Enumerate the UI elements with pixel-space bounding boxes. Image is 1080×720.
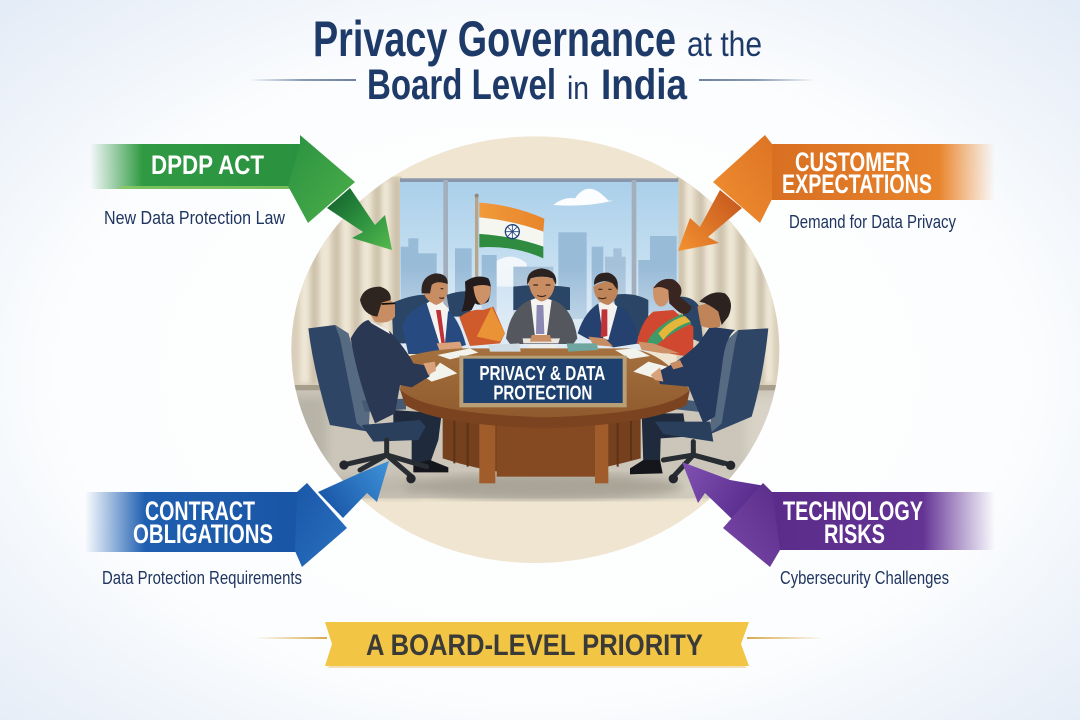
person: man 2 xyxy=(402,273,466,354)
arrow: Technology Risks (purple) xyxy=(682,462,995,588)
person: center man xyxy=(506,268,577,344)
arrow: Customer Expectations (orange) xyxy=(678,135,995,251)
arrow: DPDP Act (green): DPDP ACT xyxy=(151,150,264,180)
person: front left man upper body xyxy=(351,287,436,423)
curtains xyxy=(290,177,783,390)
person: front left man legs and chair xyxy=(308,325,448,483)
title: Privacy Governance xyxy=(313,11,676,67)
name plate xyxy=(459,356,627,407)
name plate: PROTECTION xyxy=(493,382,592,404)
arrow: Contract Obligations (blue) xyxy=(85,461,389,588)
flag xyxy=(475,194,544,282)
title: at the xyxy=(687,25,762,64)
arrow: Customer Expectations (orange): EXPECTATIONS xyxy=(782,169,932,199)
name plate: PRIVACY & DATA xyxy=(479,363,605,385)
title: in xyxy=(567,70,589,106)
central boardroom illustration xyxy=(280,130,800,570)
back chairs xyxy=(392,285,703,343)
arrow: DPDP Act (green) xyxy=(90,135,392,250)
arrow: Customer Expectations (orange): Demand for Data Privacy xyxy=(789,212,956,232)
arrow: Contract Obligations (blue): Data Protection Requirements xyxy=(102,568,302,588)
arrow: Technology Risks (purple): RISKS xyxy=(824,519,885,549)
ribbon: a board-level priority xyxy=(255,622,825,668)
person: man 5 xyxy=(578,273,639,347)
arrow: DPDP Act (green): New Data Protection Law xyxy=(104,208,286,228)
table top xyxy=(400,348,689,418)
ribbon: a board-level priority: A BOARD-LEVEL PRIORITY xyxy=(366,629,703,662)
arrow: Technology Risks (purple): Cybersecurity Challenges xyxy=(780,568,949,588)
floor xyxy=(280,385,800,500)
title xyxy=(249,11,815,109)
arrow: Technology Risks (purple): TECHNOLOGY xyxy=(783,496,923,526)
person: woman 3 xyxy=(459,276,505,346)
person: front right man legs and chair xyxy=(630,328,768,483)
table edge xyxy=(400,389,690,428)
arrow: Contract Obligations (blue): OBLIGATIONS xyxy=(133,519,273,549)
arrow: Customer Expectations (orange): CUSTOMER xyxy=(795,147,910,177)
title: India xyxy=(601,61,688,109)
window xyxy=(400,178,678,352)
table base xyxy=(443,413,641,483)
arrow: Contract Obligations (blue): CONTRACT xyxy=(145,496,255,526)
title: Board Level xyxy=(367,61,556,109)
papers and folders xyxy=(427,343,670,382)
person: front right man upper body xyxy=(651,292,735,423)
person: woman 6 xyxy=(637,279,693,357)
